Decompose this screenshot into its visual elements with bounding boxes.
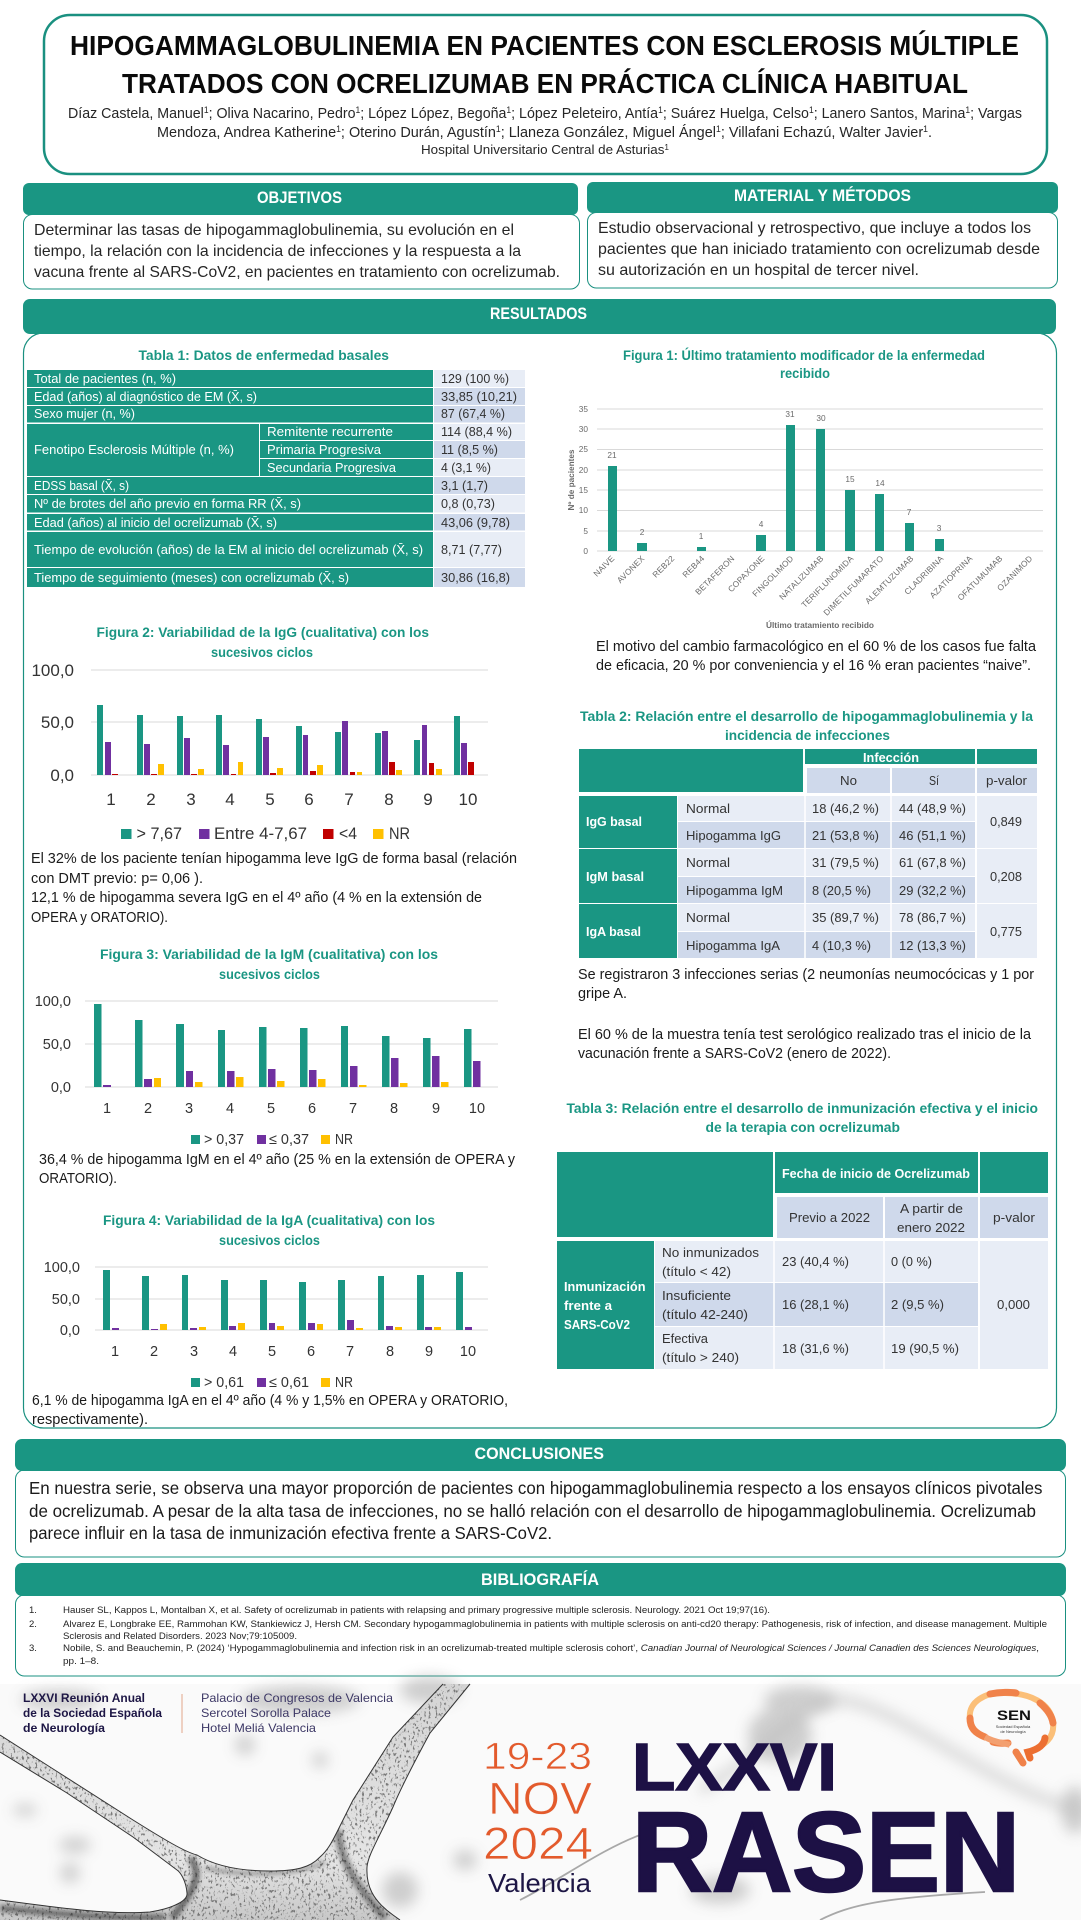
authors: ; Oliva Nacarino, Pedro: [209, 105, 356, 122]
dates: 19-23: [483, 1736, 592, 1778]
figure 4: IgA chart: 4: [229, 1344, 237, 1360]
table 2: infecciones: 29 (32,2 %): [899, 883, 966, 898]
figure 1: last treatment bar chart: CLADRIBINA: [902, 553, 946, 597]
panel: bibliografía: Nobile, S. and Beauchemin, P. (2024) ‘Hypogammaglobulinemia and infection risk in an ocrelizumab-treated multiple sclerosis cohort’, Canadian Journal of Neurological Sciences / Journal Canadien des Sciences Neurologiques ,: [63, 1643, 1039, 1654]
main title: HIPOGAMMAGLOBULINEMIA EN PACIENTES CON ESCLEROSIS MÚLTIPLE: [70, 30, 1019, 61]
figure 1: last treatment bar chart: COPAXONE: [726, 553, 767, 594]
figure 1: last treatment bar chart: 0: [583, 546, 588, 556]
figure 3: IgM chart: NR: [335, 1132, 353, 1148]
figure 1: last treatment bar chart: recibido: [780, 366, 830, 381]
authors: 1: [356, 105, 360, 115]
figure 3: IgM chart: 4: [226, 1101, 234, 1117]
figure 4: IgA chart: ≤ 0,61: [269, 1375, 309, 1391]
table 2: infecciones: Tabla 2: Relación entre el desarrollo de hipogammaglobulinemia y la: [580, 709, 1033, 724]
congress name and venues: de Neurología: [23, 1721, 105, 1735]
authors: ; Suárez Huelga, Celso: [663, 105, 809, 122]
figure 1: last treatment bar chart: 5: [583, 526, 588, 536]
congress title: RASEN: [632, 1789, 1020, 1915]
text: IgM findings: [39, 1152, 516, 1187]
table 3: inmunización: Previo a 2022: [789, 1210, 870, 1225]
text: IgA findings: [32, 1393, 508, 1428]
congress title: [632, 1730, 1020, 1915]
authors: .: [928, 124, 932, 141]
figure 4: IgA chart: 10: [460, 1344, 476, 1360]
panel: objetivos: OBJETIVOS: [257, 188, 342, 207]
panel: bibliografía: Alvarez E, Longbrake EE, Rammohan KW, Stankiewicz J, Hersh CM. Secondary hypogammaglobulinemia in patients with multiple sclerosis on anti-cd20 therapy: Pathogenesis, risk of infection, and disease management. Multiple: [63, 1619, 1047, 1630]
authors: 1: [716, 124, 721, 134]
table 2: infecciones: IgM basal: [586, 869, 644, 884]
icon: SEN brain logo: de Neurología: [1000, 1729, 1026, 1734]
panel: material y métodos: MATERIAL Y MÉTODOS: [734, 186, 911, 205]
figure 1: last treatment bar chart: ALEMTUZUMAB: [863, 553, 916, 606]
soft background cells: [13, 1676, 1081, 1908]
table 1: datos basales: Secundaria Progresiva: [267, 460, 397, 475]
dates: 2024: [483, 1818, 593, 1869]
icon: SEN brain logo: SEN: [997, 1708, 1031, 1723]
congress name and venues: [23, 1691, 393, 1735]
text: infections and serology: vacunación frente a SARS-CoV2 (enero de 2022).: [578, 1046, 891, 1062]
congress name and venues: Palacio de Congresos de Valencia: [201, 1691, 393, 1705]
figure 3: IgM chart: 5: [267, 1101, 275, 1117]
figure 1: last treatment bar chart: 4: [759, 519, 764, 529]
figure 2: IgG chart: 100,0: [31, 661, 74, 680]
figure 1: last treatment bar chart: NAIVE: [591, 553, 617, 579]
panel: material y métodos: Estudio observacional y retrospectivo, que incluye a todos los: [598, 220, 1031, 237]
panel: bibliografía: Sclerosis and Related Disorders. 2023 Nov;79:105009.: [63, 1631, 297, 1642]
heading: resultados: RESULTADOS: [490, 304, 587, 323]
figure 2: IgG chart: 0,0: [50, 766, 74, 785]
table 1: datos basales: 87 (67,4 %): [441, 406, 505, 421]
figure 4: IgA chart: NR: [335, 1375, 353, 1391]
figure 1: last treatment bar chart: AVONEX: [615, 553, 647, 585]
text: reason for change: El motivo del cambio farmacológico en el 60 % de los casos fue falta: [596, 639, 1037, 655]
authors: ; Llaneza González, Miguel Ángel: [501, 124, 716, 141]
figure 3: IgM chart: 0,0: [51, 1080, 71, 1096]
figure 2: IgG chart: 3: [186, 790, 196, 809]
text: reason for change: de eficacia, 20 % por conveniencia y el 16 % eran pacientes “naive”.: [596, 658, 1031, 674]
congress name and venues: Sercotel Sorolla Palace: [201, 1706, 331, 1720]
table 2: infecciones: 12 (13,3 %): [899, 938, 966, 953]
table 2: infecciones: 0,208: [990, 869, 1022, 884]
table 2: infecciones: Normal: [686, 910, 730, 925]
figure 2: IgG chart: NR: [389, 824, 410, 843]
figure 3: IgM chart: 2: [144, 1101, 152, 1117]
figure 2: IgG chart: sucesivos ciclos: [211, 645, 313, 660]
text: IgM findings: ORATORIO).: [39, 1171, 117, 1187]
panel: objetivos: [23, 183, 580, 289]
table 2: infecciones: 46 (51,1 %): [899, 828, 966, 843]
panel: objetivos: tiempo, la relación con la incidencia de infecciones y la respuesta a la: [34, 243, 521, 260]
figure 1: last treatment bar chart: 20: [579, 465, 588, 475]
panel: bibliografía: 3.: [29, 1643, 37, 1654]
table 3: inmunización: (título > 240): [662, 1350, 739, 1365]
table 3: inmunización: 18 (31,6 %): [782, 1341, 849, 1356]
thin neuron strands: [520, 1835, 985, 1920]
figure 4: IgA chart: 3: [190, 1344, 198, 1360]
authors: 1: [664, 143, 670, 152]
table 2: infecciones: 44 (48,9 %): [899, 801, 966, 816]
figure 1: last treatment bar chart: 25: [579, 444, 588, 454]
panel: bibliografía: 2.: [29, 1619, 37, 1630]
text: infections and serology: Se registraron 3 infecciones serias (2 neumonías neumocócicas y 1 por: [578, 967, 1034, 983]
figure 2: IgG chart: Figura 2: Variabilidad de la IgG (cualitativa) con los: [96, 625, 429, 640]
figure 1: last treatment bar chart: 15: [845, 474, 855, 484]
text: IgG findings: OPERA y ORATORIO).: [31, 910, 168, 926]
figure 2: IgG chart: 9: [423, 790, 433, 809]
figure 2: IgG chart: 50,0: [41, 713, 74, 732]
figure 2: IgG chart: > 7,67: [136, 824, 182, 843]
table 1: datos basales: 30,86 (16,8): [441, 570, 510, 585]
table 2: infecciones: 18 (46,2 %): [812, 801, 879, 816]
figure 2: IgG chart: 6: [304, 790, 314, 809]
authors: ; López Peleteiro, Antía: [511, 105, 659, 122]
table 1: datos basales: 33,85 (10,21): [441, 389, 517, 404]
table 1: datos basales: 43,06 (9,78): [441, 515, 510, 530]
neuron image: [0, 1684, 480, 1920]
panel: objetivos: vacuna frente al SARS-CoV2, en pacientes en tratamiento con ocrelizumab.: [34, 264, 560, 281]
table 3: inmunización: SARS-CoV2: [564, 1317, 630, 1332]
authors: 1: [506, 105, 511, 115]
table 1: datos basales: Tabla 1: Datos de enfermedad basales: [138, 348, 389, 363]
table 1: datos basales: Total de pacientes (n, %): [34, 371, 176, 386]
table 2: infecciones: 21 (53,8 %): [812, 828, 879, 843]
title box: [44, 15, 1047, 174]
table 2: infecciones: Hipogamma IgM: [686, 883, 783, 898]
table 3: inmunización: Inmunización: [564, 1279, 646, 1294]
text: IgG findings: 12,1 % de hipogamma severa IgG en el 4º año (4 % en la extensión de: [31, 890, 482, 906]
table 3: inmunización: Fecha de inicio de Ocrelizumab: [782, 1166, 970, 1181]
table 3: inmunización: 0,000: [997, 1297, 1030, 1312]
figure 3: IgM chart: ≤ 0,37: [269, 1132, 309, 1148]
table 3: inmunización: 16 (28,1 %): [782, 1297, 849, 1312]
figure 4: IgA chart: Figura 4: Variabilidad de la IgA (cualitativa) con los: [103, 1213, 435, 1228]
figure 3: IgM chart: 8: [390, 1101, 398, 1117]
text: infections and serology: [578, 967, 1034, 1062]
icon: SEN brain logo: Sociedad Española: [996, 1724, 1031, 1729]
figure 4: IgA chart: 5: [268, 1344, 276, 1360]
figure 1: last treatment bar chart: 30: [816, 413, 826, 423]
figure 1: last treatment bar chart: 14: [875, 478, 885, 488]
figure 3: IgM chart: 3: [185, 1101, 193, 1117]
authors: 1: [809, 105, 814, 115]
table 2: infecciones: Normal: [686, 801, 730, 816]
panel: conclusiones: de ocrelizumab. A pesar de la alta tasa de infecciones, no se halló relación con el desarrollo de hipogammaglobulinemia. Ocrelizumab: [29, 1501, 1036, 1521]
figure 4: IgA chart: 7: [346, 1344, 354, 1360]
panel: conclusiones: CONCLUSIONES: [474, 1444, 604, 1463]
table 3: inmunización: frente a: [564, 1298, 613, 1313]
table 1: datos basales: Edad (años) al diagnóstico de EM (X̄, s): [34, 389, 257, 404]
table 3: inmunización: (título 42-240): [662, 1307, 748, 1322]
text: reason for change: [596, 639, 1037, 674]
table 1: datos basales: EDSS basal (X̄, s): [34, 478, 129, 493]
figure 1: last treatment bar chart: FINGOLIMOD: [750, 553, 795, 599]
table 1: datos basales: 11 (8,5 %): [441, 442, 498, 457]
table 2: infecciones: 61 (67,8 %): [899, 855, 966, 870]
figure 3: IgM chart: [35, 947, 498, 1148]
figure 2: IgG chart: 4: [225, 790, 235, 809]
text: IgA findings: respectivamente).: [32, 1412, 148, 1428]
table 1: datos basales: 129 (100 %): [441, 371, 509, 386]
authors: 1: [336, 124, 341, 134]
figure 1: last treatment bar chart: OFATUMUMAB: [955, 553, 1005, 602]
text: IgG findings: con DMT previo: p= 0,06 ).: [31, 871, 203, 887]
figure 3: IgM chart: > 0,37: [204, 1132, 244, 1148]
congress title: LXXVI: [632, 1730, 837, 1805]
text: IgG findings: [31, 851, 517, 926]
congress name and venues: Hotel Meliá Valencia: [201, 1721, 316, 1735]
figure 4: IgA chart: 100,0: [44, 1260, 80, 1276]
panel: bibliografía: BIBLIOGRAFÍA: [481, 1570, 599, 1589]
table 1: datos basales: Sexo mujer (n, %): [34, 406, 135, 421]
figure 3: IgM chart: 7: [349, 1101, 357, 1117]
authors: Díaz Castela, Manuel: [68, 105, 211, 122]
figure 1: last treatment bar chart: 15: [579, 485, 588, 495]
panel: bibliografía: Hauser SL, Kappos L, Montalban X, et al. Safety of ocrelizumab in patients with relapsing and primary progressive multiple sclerosis. Neurology. 2021 Oct 19;97(16).: [63, 1605, 770, 1616]
authors: 1: [658, 105, 663, 115]
table 1: datos basales: 0,8 (0,73): [441, 496, 495, 511]
figure 3: IgM chart: 1: [103, 1101, 111, 1117]
table 3: inmunización: de la terapia con ocrelizumab: [706, 1120, 900, 1135]
authors: ; Villafani Echazú, Walter Javier: [721, 124, 923, 141]
figure 1: last treatment bar chart: OZANIMOD: [995, 553, 1034, 593]
panel: conclusiones: [15, 1439, 1066, 1557]
figure 4: IgA chart: 6: [307, 1344, 315, 1360]
figure 1: last treatment bar chart: TERIFLUNOMIDA: [799, 553, 856, 610]
table 2: infecciones: 78 (86,7 %): [899, 910, 966, 925]
table 3: inmunización: [557, 1101, 1048, 1369]
authors: 1: [204, 105, 209, 115]
figure 1: last treatment bar chart: 31: [785, 409, 795, 419]
figure 1: last treatment bar chart: 10: [579, 505, 588, 515]
figure 4: IgA chart: [44, 1213, 488, 1391]
figure 3: IgM chart: 6: [308, 1101, 316, 1117]
figure 3: IgM chart: sucesivos ciclos: [219, 967, 320, 982]
figure 1: last treatment bar chart: Figura 1: Último tratamiento modificador de la enfermedad: [623, 348, 985, 363]
table 2: infecciones: 0,775: [990, 924, 1022, 939]
figure 4: IgA chart: 50,0: [52, 1292, 80, 1308]
city: Valencia: [488, 1868, 592, 1898]
main title: [70, 30, 1019, 99]
authors: ; Vargas: [970, 105, 1022, 122]
figure 1: last treatment bar chart: REB44: [680, 553, 707, 580]
figure 4: IgA chart: 9: [425, 1344, 433, 1360]
table 2: infecciones: IgA basal: [586, 924, 641, 939]
panel: bibliografía: 1.: [29, 1605, 37, 1616]
figure 2: IgG chart: 8: [384, 790, 394, 809]
table 3: inmunización: p-valor: [993, 1210, 1036, 1225]
figure 1: last treatment bar chart: AZATIOPRINA: [927, 553, 975, 600]
text: IgM findings: 36,4 % de hipogamma IgM en el 4º año (25 % en la extensión de OPERA y: [39, 1152, 516, 1168]
authors: ; Oterino Durán, Agustín: [341, 124, 496, 141]
panel: material y métodos: pacientes que han iniciado tratamiento con ocrelizumab desde: [598, 241, 1040, 258]
panel: resultados: [23, 299, 1056, 1428]
authors: Hospital Universitario Central de Asturias: [421, 142, 657, 157]
panel: objetivos: Determinar las tasas de hipogammaglobulinemia, su evolución en el: [34, 222, 514, 239]
authors: Mendoza, Andrea Katherine: [157, 124, 343, 141]
panel: conclusiones: En nuestra serie, se observa una mayor proporción de pacientes con hipogammaglobulinemia respecto a los ensayos clínicos pivotales: [29, 1478, 1043, 1498]
table 2: infecciones: 0,849: [990, 814, 1022, 829]
table 1: datos basales: [27, 348, 525, 587]
figure 1: last treatment bar chart: REB22: [650, 553, 677, 580]
table 2: infecciones: 35 (89,7 %): [812, 910, 879, 925]
congress name and venues: de la Sociedad Española: [23, 1706, 162, 1720]
figure 1: last treatment bar chart: 1: [699, 531, 704, 541]
authors: 1: [496, 124, 501, 134]
figure 1: last treatment bar chart: NATALIZUMAB: [777, 553, 826, 602]
figure 1: last treatment bar chart: DIMETILFUMARATO: [821, 553, 886, 618]
table 2: infecciones: 4 (10,3 %): [812, 938, 871, 953]
table 1: datos basales: 3,1 (1,7): [441, 478, 488, 493]
heading: resultados: [23, 299, 1056, 334]
table 2: infecciones: Hipogamma IgA: [686, 938, 780, 953]
authors: ; López López, Begoña: [360, 105, 507, 122]
table 2: infecciones: Sí: [929, 773, 939, 788]
table 3: inmunización: 19 (90,5 %): [891, 1341, 959, 1356]
table 1: datos basales: Tiempo de seguimiento (meses) con ocrelizumab (X̄, s): [34, 570, 349, 585]
main title: TRATADOS CON OCRELIZUMAB EN PRÁCTICA CLÍNICA HABITUAL: [122, 68, 968, 99]
figure 2: IgG chart: 5: [265, 790, 275, 809]
figure 2: IgG chart: 1: [106, 790, 116, 809]
icon: SEN brain logo: [970, 1692, 1053, 1763]
panel: bibliografía: [15, 1563, 1066, 1676]
table 1: datos basales: Nº de brotes del año previo en forma RR (X̄, s): [34, 496, 301, 511]
figure 2: IgG chart: Entre 4-7,67: [214, 824, 307, 843]
table 3: inmunización: Tabla 3: Relación entre el desarrollo de inmunización efectiva y el inicio: [566, 1101, 1038, 1116]
table 2: infecciones: [579, 709, 1037, 958]
table 1: datos basales: 4 (3,1 %): [441, 460, 491, 475]
table 3: inmunización: Efectiva: [662, 1331, 709, 1346]
text: infections and serology: gripe A.: [578, 986, 627, 1002]
table 3: inmunización: 23 (40,4 %): [782, 1254, 849, 1269]
table 2: infecciones: 8 (20,5 %): [812, 883, 871, 898]
figure 3: IgM chart: 50,0: [43, 1037, 71, 1053]
figure 2: IgG chart: [31, 625, 488, 843]
authors: 1: [965, 105, 970, 115]
figure 1: last treatment bar chart: 21: [607, 450, 617, 460]
figure 3: IgM chart: 100,0: [35, 994, 71, 1010]
authors: ; Lanero Santos, Marina: [814, 105, 966, 122]
figure 4: IgA chart: > 0,61: [204, 1375, 244, 1391]
figure 2: IgG chart: <4: [339, 824, 357, 843]
figure 1: last treatment bar chart: Último tratamiento recibido: [766, 619, 874, 630]
figure 4: IgA chart: 2: [150, 1344, 158, 1360]
table 3: inmunización: A partir de: [900, 1201, 963, 1216]
table 2: infecciones: Hipogamma IgG: [686, 828, 781, 843]
table 1: datos basales: 114 (88,4 %): [441, 424, 512, 439]
figure 1: last treatment bar chart: [566, 348, 1043, 630]
table 2: infecciones: Infección: [863, 750, 919, 765]
table 2: infecciones: incidencia de infecciones: [725, 728, 890, 743]
figure 4: IgA chart: 8: [386, 1344, 394, 1360]
authors: 1: [923, 124, 928, 134]
figure 2: IgG chart: 10: [459, 790, 477, 809]
figure 1: last treatment bar chart: 2: [640, 527, 645, 537]
table 1: datos basales: Edad (años) al inicio del ocrelizumab (X̄, s): [34, 515, 277, 530]
table 1: datos basales: Primaria Progresiva: [267, 442, 382, 457]
table 3: inmunización: Insuficiente: [662, 1288, 731, 1303]
panel: bibliografía: pp. 1–8.: [63, 1656, 99, 1667]
table 2: infecciones: No: [840, 773, 857, 788]
figure 3: IgM chart: 10: [469, 1101, 485, 1117]
figure 4: IgA chart: 0,0: [60, 1323, 80, 1339]
table 1: datos basales: 8,71 (7,77): [441, 542, 502, 557]
table 1: datos basales: Fenotipo Esclerosis Múltiple (n, %): [34, 442, 234, 457]
panel: material y métodos: [587, 182, 1058, 288]
authors: [68, 105, 1022, 157]
table 3: inmunización: 2 (9,5 %): [891, 1297, 944, 1312]
banner: LXXVI RASEN congress: [0, 1676, 1081, 1920]
table 3: inmunización: (título < 42): [662, 1264, 731, 1279]
figure 4: IgA chart: 1: [111, 1344, 119, 1360]
table 2: infecciones: Normal: [686, 855, 730, 870]
figure 1: last treatment bar chart: BETAFERON: [693, 553, 736, 597]
text: infections and serology: El 60 % de la muestra tenía test serológico realizado tras el inicio de la: [578, 1027, 1032, 1043]
text: IgA findings: 6,1 % de hipogamma IgA en el 4º año (4 % y 1,5% en OPERA y ORATORIO,: [32, 1393, 508, 1409]
figure 1: last treatment bar chart: Nº de pacientes: [566, 449, 576, 510]
figure 3: IgM chart: 9: [432, 1101, 440, 1117]
table 3: inmunización: 0 (0 %): [891, 1254, 932, 1269]
figure 1: last treatment bar chart: 3: [937, 523, 942, 533]
figure 1: last treatment bar chart: 30: [579, 424, 588, 434]
text: IgG findings: El 32% de los paciente tenían hipogamma leve IgG de forma basal (relación: [31, 851, 517, 867]
congress name and venues: LXXVI Reunión Anual: [23, 1691, 145, 1705]
table 3: inmunización: No inmunizados: [662, 1245, 760, 1260]
figure 3: IgM chart: Figura 3: Variabilidad de la IgM (cualitativa) con los: [100, 947, 438, 962]
figure 4: IgA chart: sucesivos ciclos: [219, 1233, 320, 1248]
table 1: datos basales: Remitente recurrente: [267, 424, 393, 439]
panel: material y métodos: su autorización en un hospital de tercer nivel.: [598, 262, 919, 279]
table 1: datos basales: Tiempo de evolución (años) de la EM al inicio del ocrelizumab (X̄, s): [34, 542, 423, 557]
dates: NOV: [488, 1773, 592, 1824]
figure 1: last treatment bar chart: 35: [579, 404, 588, 414]
figure 1: last treatment bar chart: 7: [907, 507, 912, 517]
table 2: infecciones: 31 (79,5 %): [812, 855, 879, 870]
figure 2: IgG chart: 2: [146, 790, 156, 809]
table 2: infecciones: p-valor: [986, 773, 1028, 788]
figure 2: IgG chart: 7: [344, 790, 354, 809]
dates: [483, 1736, 593, 1869]
panel: conclusiones: parece influir en la tasa de inmunización efectiva frente a SARS-CoV2.: [29, 1523, 552, 1543]
table 3: inmunización: enero 2022: [897, 1220, 965, 1235]
table 2: infecciones: IgG basal: [586, 814, 642, 829]
